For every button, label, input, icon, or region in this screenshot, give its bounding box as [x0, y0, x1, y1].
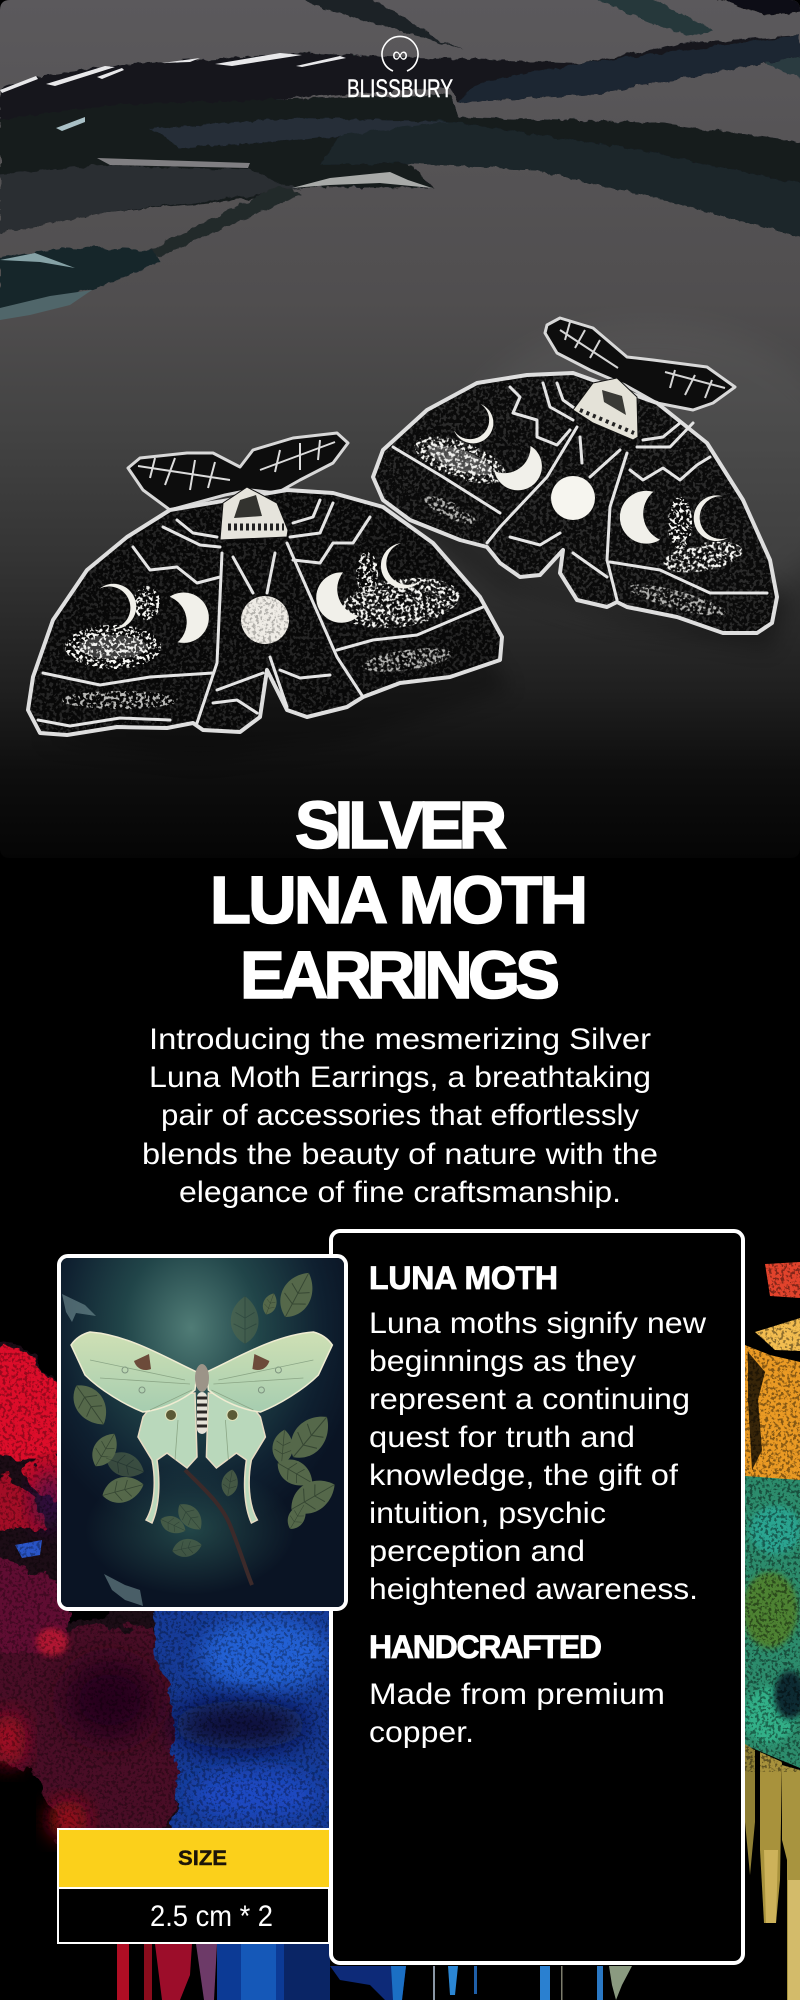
body text: luna moth: beginnings as they [369, 1345, 636, 1378]
body text: luna moth: intuition, psychic [369, 1497, 606, 1530]
body text: luna moth: quest for truth and [369, 1421, 635, 1454]
logo: ∞ [392, 42, 408, 67]
intro paragraph: Introducing the mesmerizing Silver [149, 1023, 651, 1056]
earring: right moth [370, 318, 790, 650]
size table [58, 1829, 329, 1943]
body text: handcrafted: copper. [369, 1716, 474, 1749]
intro paragraph: Luna Moth Earrings, a breathtaking [149, 1061, 651, 1094]
wings [28, 490, 502, 735]
body text: handcrafted [369, 1678, 665, 1749]
body text: luna moth: knowledge, the gift of [369, 1459, 679, 1492]
earring: left moth [25, 433, 510, 760]
heading: handcrafted: HANDCRAFTED [369, 1629, 602, 1665]
body text: luna moth: heightened awareness. [369, 1573, 698, 1606]
body text: luna moth [369, 1307, 706, 1606]
logo [347, 36, 453, 103]
title: LUNA MOTH [210, 863, 588, 938]
paint splash: right [742, 1262, 800, 2000]
wings [373, 373, 777, 633]
luna moth painting [59, 1256, 346, 1609]
body text: luna moth: Luna moths signify new [369, 1307, 706, 1340]
body text: luna moth: represent a continuing [369, 1383, 690, 1416]
hero photo: earrings on grey surface with feathers [0, 0, 800, 858]
intro paragraph: pair of accessories that effortlessly [161, 1099, 639, 1132]
leaves [65, 1266, 342, 1559]
branch [185, 1470, 252, 1585]
intro paragraph: elegance of fine craftsmanship. [179, 1176, 621, 1209]
antennae [545, 318, 735, 410]
text panel [331, 1231, 743, 1963]
size header: SIZE [178, 1847, 227, 1870]
intro paragraph [142, 1023, 658, 1209]
feathers [0, 0, 800, 320]
size value: 2.5 cm * 2 [150, 1900, 273, 1933]
paint splash: left [0, 1340, 345, 1840]
small distant moths [62, 1294, 143, 1606]
moth wings [71, 1332, 332, 1523]
antennae [128, 433, 348, 510]
logo: BLISSBURY [347, 75, 453, 103]
body text: luna moth: perception and [369, 1535, 585, 1568]
paint splash: bottom drips [117, 1944, 632, 2000]
title: SILVER [295, 788, 507, 863]
heading: luna moth: LUNA MOTH [369, 1260, 558, 1296]
title [210, 788, 588, 1013]
head [573, 378, 638, 440]
intro paragraph: blends the beauty of nature with the [142, 1138, 658, 1171]
size header [59, 1830, 329, 1887]
body text: handcrafted: Made from premium [369, 1678, 665, 1711]
title: EARRINGS [240, 938, 560, 1013]
head [220, 487, 288, 540]
